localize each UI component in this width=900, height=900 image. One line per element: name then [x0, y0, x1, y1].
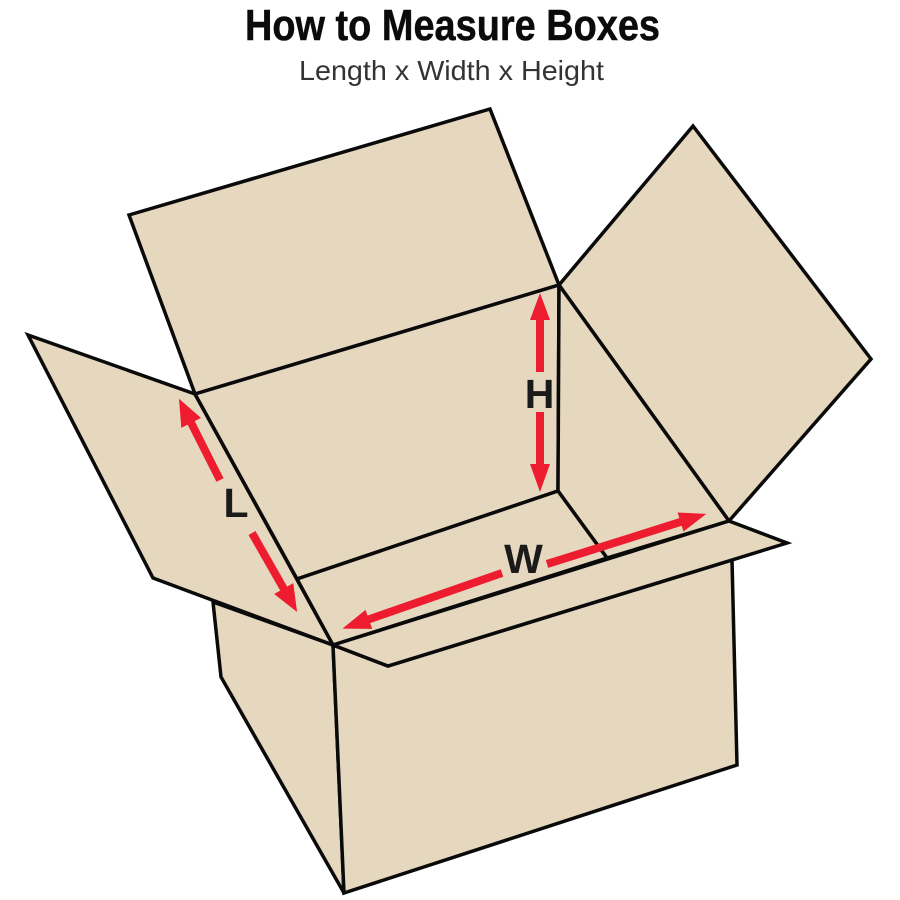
subtitle: Length x Width x Height — [299, 55, 604, 86]
front flap — [333, 521, 787, 666]
height arrow, lower — [530, 412, 550, 492]
width arrow, right — [544, 504, 709, 574]
box left side — [213, 602, 344, 893]
label W: W — [504, 536, 543, 582]
left flap — [28, 335, 333, 645]
inner floor — [297, 491, 607, 645]
title: How to Measure Boxes — [245, 1, 660, 50]
label H: H — [525, 371, 554, 417]
label L: L — [223, 480, 249, 526]
length arrow, lower — [242, 528, 307, 617]
inner right wall — [558, 285, 729, 558]
height arrow, upper — [530, 293, 550, 372]
inner back wall — [195, 285, 559, 579]
width arrow, left — [339, 564, 505, 638]
right flap — [559, 126, 871, 521]
back flap — [129, 109, 559, 394]
length arrow, upper — [169, 394, 230, 485]
box front face — [333, 560, 737, 893]
